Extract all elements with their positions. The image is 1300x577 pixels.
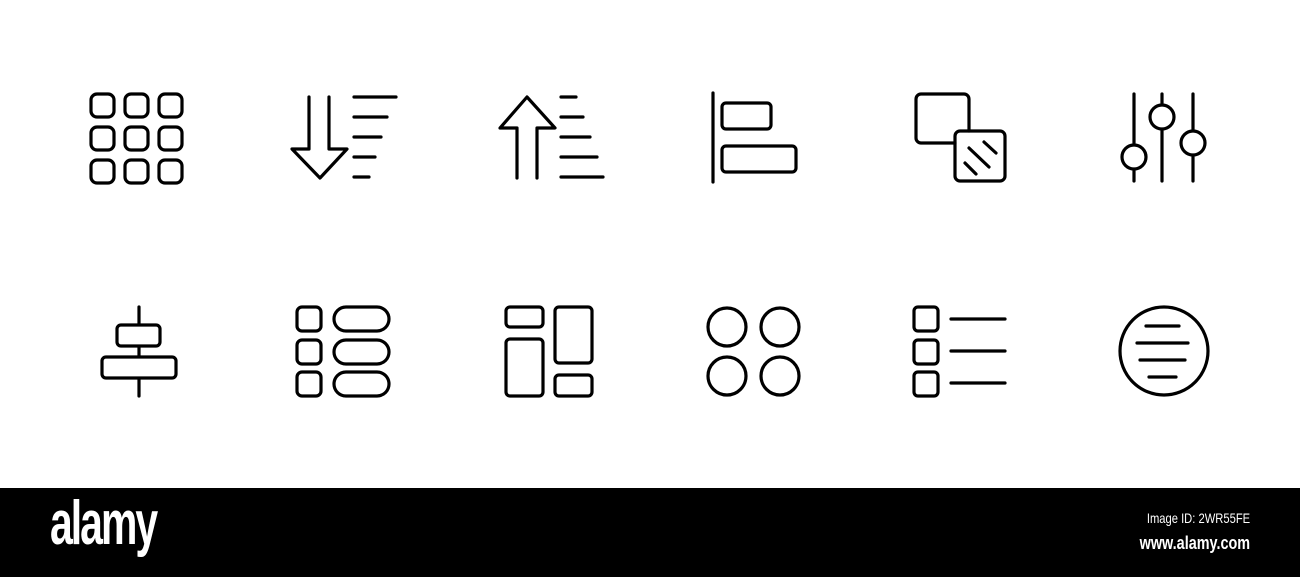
icon: align left	[713, 93, 796, 182]
footer bar	[0, 488, 1300, 577]
icon: four circles	[708, 308, 799, 395]
icon: sort descending	[292, 97, 396, 178]
icon: list with pills	[297, 307, 389, 396]
logo: alamy: alamy	[50, 489, 156, 558]
image id text: Image ID: 2WR55FE	[1147, 510, 1250, 526]
icon: sort ascending	[500, 97, 603, 178]
icon: circle with lines	[1120, 307, 1208, 395]
icon: grid 3x3	[91, 94, 182, 183]
icon: overlapping squares	[916, 94, 1005, 181]
icon: checklist	[914, 307, 1005, 396]
icon: layout blocks	[506, 307, 592, 396]
url text: www.alamy.com	[1140, 533, 1250, 553]
icon: align center	[102, 307, 176, 396]
icon: sliders	[1122, 94, 1205, 181]
